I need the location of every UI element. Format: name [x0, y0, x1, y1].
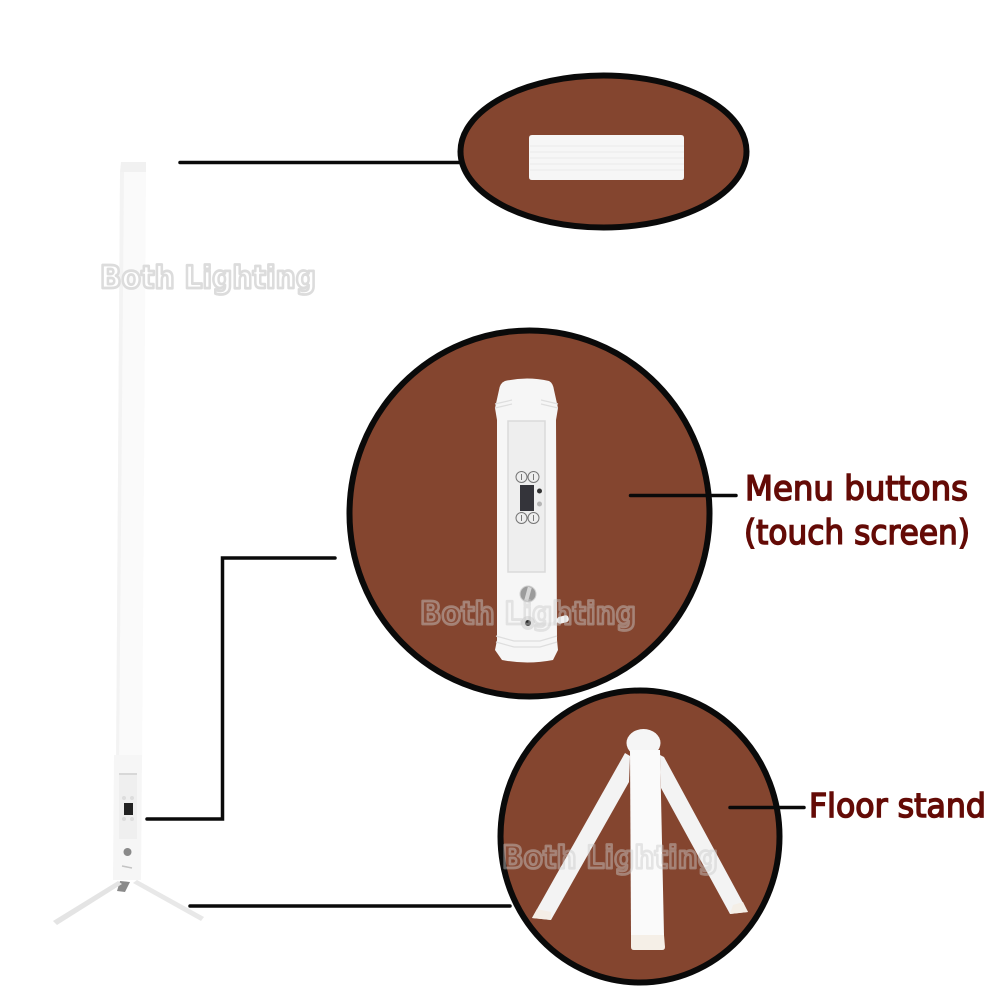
leader line: menu buttons [630, 494, 736, 497]
label: floor stand: Floor stand [809, 786, 986, 825]
label: touch screen: (touch screen) [744, 513, 970, 553]
leader line: floor stand on tube [190, 904, 510, 908]
screw knob [520, 586, 536, 602]
menu buttons [516, 472, 539, 524]
watermark: control panel: Both Lighting [420, 596, 636, 632]
panel: top end cap ellipse [460, 76, 746, 228]
watermark: tube: Both Lighting [100, 260, 316, 296]
icon: end cap [529, 135, 684, 180]
icon: full light tube product on tripod [53, 162, 204, 925]
panel: control panel circle [350, 330, 710, 696]
LCD display [520, 485, 534, 511]
watermark: floor stand: Both Lighting [502, 840, 718, 876]
label: menu buttons: Menu buttons [745, 469, 968, 509]
touch screen window [508, 421, 545, 572]
panel: floor stand circle [500, 690, 780, 982]
icon: control unit body [495, 378, 570, 662]
leader line: control panel elbow [147, 558, 335, 819]
icon: tripod stand [532, 729, 748, 950]
leader line: top end [180, 161, 462, 164]
power socket and connector [521, 616, 535, 630]
leader line: floor stand label [730, 806, 804, 809]
